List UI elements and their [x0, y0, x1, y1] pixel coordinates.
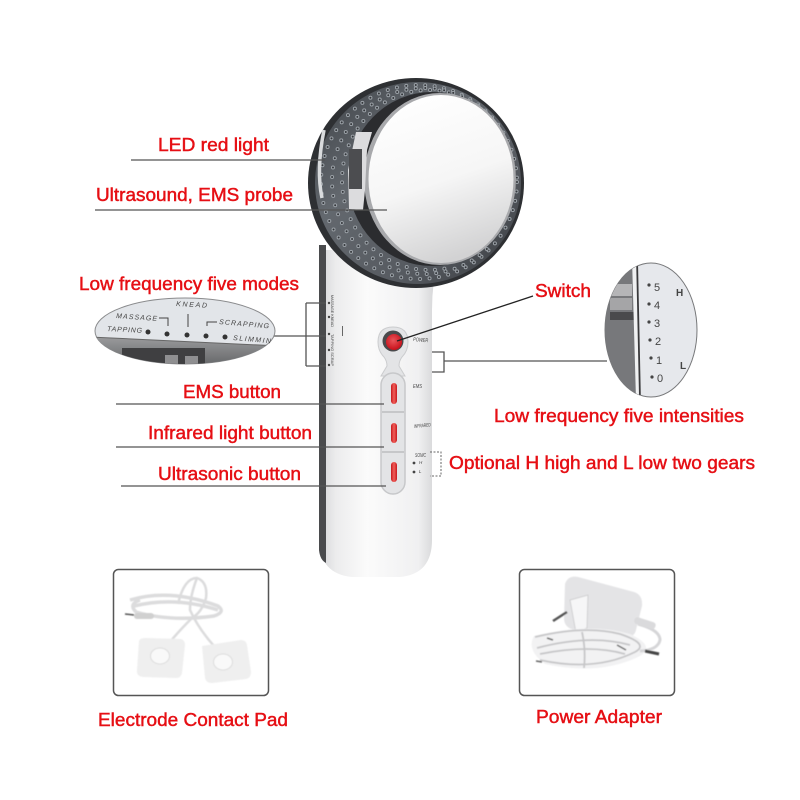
label: Infrared light button: Infrared light button [148, 423, 312, 443]
callout: five intensities magnifier [600, 258, 697, 400]
callout: five intensities magnifier: L [680, 361, 686, 372]
callout: five intensities magnifier: 1 [656, 355, 662, 367]
printed button labels: EMS [413, 384, 422, 390]
leader lines [95, 160, 607, 486]
side labels: MASSAGE KNEAD [330, 295, 334, 327]
printed button labels: H [419, 460, 423, 465]
printed button labels: SONIC [415, 453, 426, 459]
label: Ultrasound, EMS probe: Ultrasound, EMS probe [96, 185, 293, 205]
LED red light window [319, 130, 324, 198]
icon: adapter [532, 577, 660, 668]
callout: five intensities magnifier: 3 [654, 318, 660, 330]
callout: five modes magnifier [94, 298, 276, 364]
callout: five intensities magnifier: 5 [654, 282, 660, 294]
callout: five modes magnifier: MASSAGE [116, 313, 158, 323]
label: Electrode Contact Pad: Electrode Contact Pad [98, 710, 288, 730]
device handle [319, 250, 440, 577]
label: Ultrasonic button: Ultrasonic button [158, 464, 301, 484]
printed button labels: INFRARED [414, 422, 431, 430]
callout: five intensities magnifier: 4 [654, 300, 660, 312]
infrared button [391, 423, 397, 443]
panel: electrode contact pad [114, 570, 268, 696]
label: Power Adapter: Power Adapter [536, 707, 662, 727]
control panel [381, 373, 405, 494]
callout: five modes magnifier: SLIMMIN [233, 335, 272, 345]
callout: five modes magnifier: KNEAD [176, 301, 207, 310]
label: EMS button: EMS button [183, 382, 281, 402]
handle dark side stripe [319, 245, 326, 563]
EMS button [391, 383, 397, 404]
side labels: TAPPING SCRAP [330, 334, 334, 367]
panel: power adapter [520, 570, 674, 696]
printed button labels: L [419, 469, 422, 474]
metal contact strips [348, 132, 372, 210]
power label: POWER [413, 337, 428, 344]
label: Low frequency five modes: Low frequency five modes [79, 274, 299, 294]
device [308, 78, 524, 577]
inner dark collar [348, 92, 516, 266]
infographic [80, 78, 755, 728]
label: Optional H high and L low two gears: Optional H high and L low two gears [449, 453, 755, 473]
callout: five intensities magnifier: 0 [657, 373, 663, 385]
printed button labels [413, 384, 431, 474]
power button [378, 327, 408, 376]
callout: five modes magnifier: SCRAPPING [219, 319, 270, 330]
label: Switch: Switch [535, 281, 591, 301]
callout: five intensities magnifier: H [676, 288, 683, 299]
label: Low frequency five intensities: Low frequency five intensities [494, 406, 744, 426]
callout: five intensities magnifier: 2 [655, 336, 661, 348]
device head ring [308, 78, 524, 288]
callout: five modes magnifier: TAPPING [107, 326, 143, 335]
gear bracket [430, 452, 441, 476]
ultrasound probe mirror [368, 95, 514, 263]
ultrasonic button [391, 462, 397, 482]
icon: electrode accessory [125, 578, 251, 683]
side labels [328, 295, 343, 367]
label: LED red light: LED red light [158, 135, 269, 155]
